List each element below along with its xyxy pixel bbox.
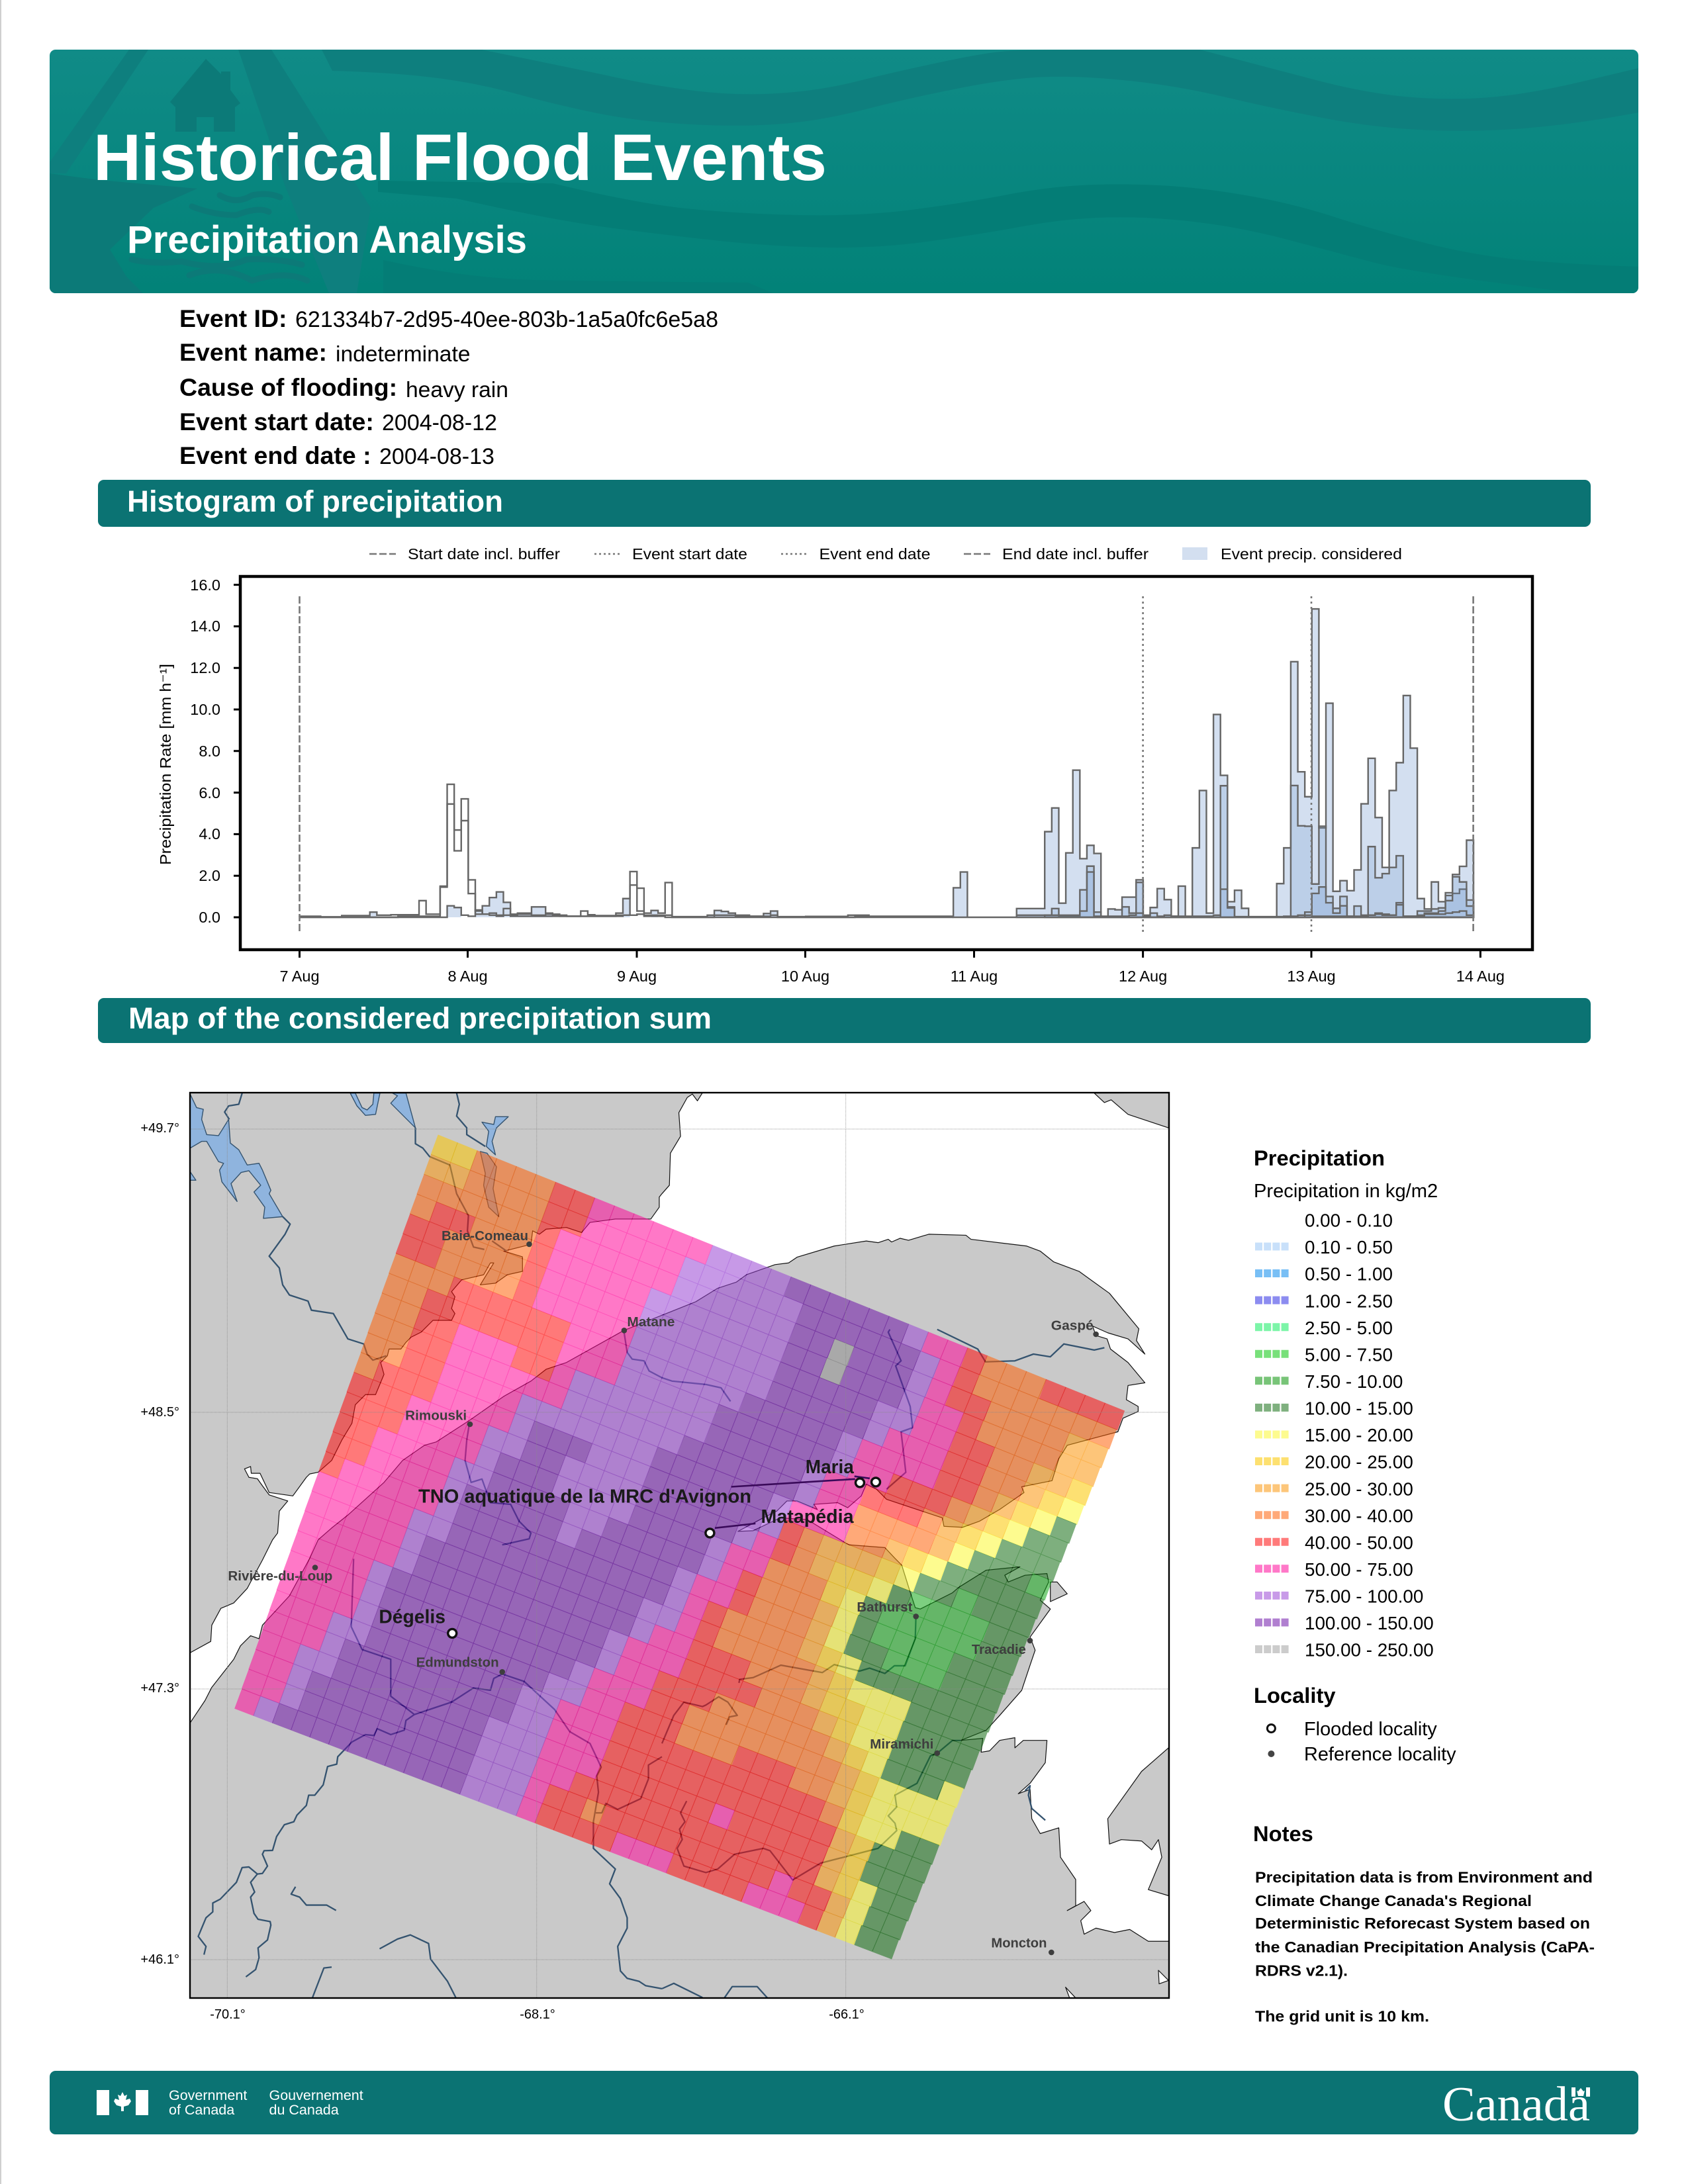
date marker lines	[299, 596, 1474, 933]
latitude labels: +47.3°	[140, 1681, 179, 1696]
histogram legend	[369, 545, 1402, 563]
event metadata block: 2004-08-13	[379, 444, 494, 469]
flooded localities: Dégelis	[379, 1607, 445, 1628]
subtitle: Precipitation Analysis	[127, 218, 527, 261]
latitude labels: +48.5°	[140, 1405, 179, 1420]
government wordmark: Gouvernement	[269, 2087, 363, 2103]
flooded localities	[379, 1457, 880, 1637]
y axis tick labels	[190, 576, 220, 926]
histogram legend: Event end date	[820, 545, 931, 563]
title: Historical Flood Events	[93, 120, 827, 194]
histogram legend: Start date incl. buffer	[408, 545, 560, 563]
histogram bars	[299, 609, 1474, 917]
notes: RDRS v2.1).	[1255, 1962, 1348, 1979]
legend: precipitation: 50.00 - 75.00	[1305, 1559, 1413, 1580]
legend: precipitation: 30.00 - 40.00	[1305, 1506, 1413, 1526]
legend: precipitation: 20.00 - 25.00	[1305, 1452, 1413, 1473]
x axis tick labels: 10 Aug	[781, 968, 829, 985]
y axis tick labels: 4.0	[199, 825, 220, 842]
event metadata block: Event ID:	[179, 304, 287, 332]
legend: precipitation: 5.00 - 7.50	[1305, 1345, 1393, 1365]
government wordmark: Government	[169, 2087, 247, 2103]
legend: locality: Flooded locality	[1304, 1719, 1437, 1740]
heading: histogram of precipitation	[98, 480, 1591, 527]
latitude labels: +46.1°	[140, 1952, 179, 1967]
precipitation raster grid	[234, 1134, 1125, 1959]
heading: histogram of precipitation: Histogram of precipitation	[127, 484, 503, 518]
event metadata block: Cause of flooding:	[179, 373, 397, 401]
x axis tick labels: 11 Aug	[951, 968, 998, 985]
event metadata block: 2004-08-12	[382, 410, 497, 435]
flooded localities: Matapédia	[761, 1506, 855, 1527]
canada wordmark: Canada	[1442, 2077, 1590, 2132]
y axis tick labels: 16.0	[190, 576, 220, 594]
legend: precipitation: Precipitation	[1254, 1146, 1385, 1170]
heading: map of the considered precipitation sum	[98, 998, 1591, 1043]
x axis tick labels: 7 Aug	[279, 968, 320, 985]
latitude labels: +49.7°	[140, 1121, 179, 1136]
rivers east	[886, 1330, 1104, 1489]
reference localities: Edmundston	[416, 1656, 499, 1670]
x axis tick labels: 12 Aug	[1119, 968, 1167, 985]
legend: precipitation: 150.00 - 250.00	[1305, 1640, 1434, 1661]
reference localities: Moncton	[991, 1936, 1047, 1951]
event metadata block: 621334b7-2d95-40ee-803b-1a5a0fc6e5a8	[295, 307, 718, 332]
flooded localities: TNO aquatique de la MRC d'Avignon	[418, 1486, 751, 1508]
latitude labels	[140, 1121, 179, 1967]
flooded localities: Maria	[806, 1457, 855, 1478]
government wordmark	[169, 2087, 363, 2118]
legend: precipitation: 25.00 - 30.00	[1305, 1479, 1413, 1499]
chart frame and ticks	[234, 576, 1532, 958]
legend: locality: Locality	[1254, 1683, 1336, 1707]
rivers north and centre	[224, 1093, 731, 1545]
legend: precipitation: 0.10 - 0.50	[1305, 1237, 1393, 1257]
legend: precipitation: 75.00 - 100.00	[1305, 1586, 1423, 1607]
legend: precipitation: 0.00 - 0.10	[1305, 1210, 1393, 1231]
legend: precipitation: 15.00 - 20.00	[1305, 1425, 1413, 1445]
histogram legend: End date incl. buffer	[1002, 545, 1149, 563]
histogram chart	[157, 576, 1532, 985]
map frame	[190, 1093, 1169, 1998]
histogram legend: Event precip. considered	[1221, 545, 1402, 563]
longitude labels	[210, 2007, 865, 2022]
y axis tick labels: 10.0	[190, 701, 220, 718]
legend: precipitation: 100.00 - 150.00	[1305, 1613, 1434, 1633]
x axis tick labels: 14 Aug	[1456, 968, 1505, 985]
notes	[1253, 1821, 1595, 2025]
longitude labels: -66.1°	[829, 2007, 865, 2022]
legend: locality: Reference locality	[1304, 1744, 1456, 1765]
notes: The grid unit is 10 km.	[1255, 2008, 1429, 2025]
legend: locality	[1254, 1683, 1456, 1765]
y axis tick labels: 6.0	[199, 784, 220, 801]
x axis tick labels: 9 Aug	[617, 968, 657, 985]
rivers south east	[662, 1617, 1045, 1998]
reference localities: Rivière-du-Loup	[228, 1569, 332, 1584]
reference localities: Bathurst	[857, 1600, 913, 1615]
raster cell borders	[242, 1142, 1117, 1951]
reference localities: Miramichi	[870, 1737, 933, 1752]
heading: map of the considered precipitation sum: Map of the considered precipitation sum	[128, 1001, 712, 1035]
reference localities	[228, 1229, 1099, 1955]
lakes	[190, 1093, 508, 1218]
event metadata block: heavy rain	[406, 378, 508, 402]
y axis tick labels: 12.0	[190, 659, 220, 676]
x axis tick labels	[279, 968, 1505, 985]
notes: Precipitation data is from Environment and	[1255, 1869, 1593, 1886]
event metadata block	[179, 304, 718, 469]
footer bar	[50, 2071, 1638, 2134]
y axis tick labels: 2.0	[199, 867, 220, 884]
legend: precipitation: 0.50 - 1.00	[1305, 1264, 1393, 1285]
longitude labels: -68.1°	[520, 2007, 555, 2022]
government wordmark: du Canada	[269, 2102, 339, 2118]
event metadata block: indeterminate	[336, 342, 470, 367]
event metadata block: Event end date :	[179, 441, 371, 469]
header banner	[50, 50, 1638, 293]
government wordmark: of Canada	[169, 2102, 234, 2118]
longitude labels: -70.1°	[210, 2007, 246, 2022]
rivers south west	[198, 1559, 662, 1998]
legend: precipitation: 1.00 - 2.50	[1305, 1291, 1393, 1311]
y axis tick labels: 0.0	[199, 909, 220, 926]
reference localities: Baie-Comeau	[442, 1229, 528, 1244]
reference localities: Tracadie	[972, 1643, 1026, 1657]
reference localities: Matane	[627, 1315, 675, 1330]
legend: precipitation: 2.50 - 5.00	[1305, 1318, 1393, 1338]
reference localities: Gaspé	[1051, 1318, 1094, 1333]
legend: precipitation: Precipitation in kg/m2	[1254, 1181, 1438, 1202]
legend: precipitation	[1254, 1146, 1438, 1661]
y axis title: Precipitation Rate [mm h⁻¹]	[157, 664, 174, 865]
event metadata block: Event name:	[179, 338, 327, 366]
map panel	[140, 1093, 1169, 2022]
notes: Deterministic Reforecast System based on	[1255, 1915, 1590, 1932]
histogram legend: Event start date	[632, 545, 747, 563]
y axis tick labels: 14.0	[190, 617, 220, 635]
notes: Notes	[1253, 1821, 1313, 1846]
icon: government flag symbol	[97, 2090, 148, 2115]
legend: precipitation: 7.50 - 10.00	[1305, 1371, 1403, 1392]
legend: precipitation: 40.00 - 50.00	[1305, 1532, 1413, 1553]
x axis tick labels: 8 Aug	[447, 968, 488, 985]
reference localities: Rimouski	[405, 1408, 467, 1423]
y axis tick labels: 8.0	[199, 743, 220, 760]
notes: the Canadian Precipitation Analysis (CaPA-	[1255, 1938, 1595, 1956]
x axis tick labels: 13 Aug	[1287, 968, 1336, 985]
notes: Climate Change Canada's Regional	[1255, 1892, 1532, 1909]
event metadata block: Event start date:	[179, 408, 374, 435]
land masses	[190, 1093, 1169, 1998]
legend: precipitation: 10.00 - 15.00	[1305, 1398, 1413, 1419]
